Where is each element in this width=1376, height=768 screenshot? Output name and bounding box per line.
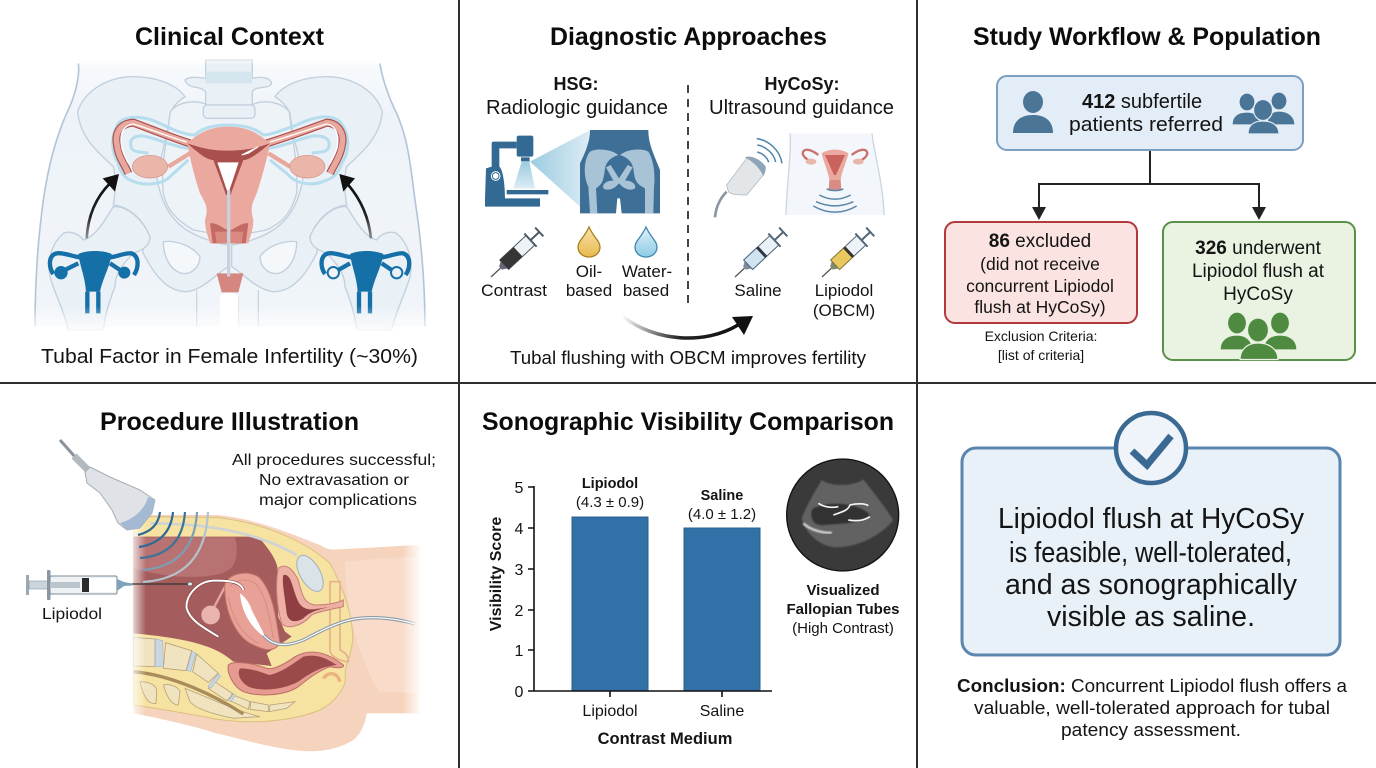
bar: lipiodol [572,517,648,691]
box: excluded: concurrent Lipiodol [966,276,1114,296]
reproductive tract in detail [113,117,348,277]
body silhouette [35,63,425,327]
caption: tubal factor: Tubal Factor in Female Infertility (~30%) [41,346,418,368]
panel: diagnostic approaches [481,23,894,368]
caption: visualized fallopian tubes [786,582,900,637]
panel: conclusion [957,413,1348,740]
box: excluded [945,222,1137,323]
icon: saline syringe [729,225,789,284]
y tick labels: 5 [515,480,524,497]
label: lipiodol OBCM: (OBCM) [813,301,875,320]
icon: ultrasound probe [60,440,155,530]
bar chart: Saline [700,703,744,720]
left hip bone [78,77,228,292]
box: underwent flush [1163,222,1355,360]
subheading: HSG: Radiologic guidance [486,97,668,119]
peritoneal cavity [133,537,292,666]
subheading: HyCoSy [709,74,894,119]
leg columns [197,290,258,327]
label: water-based: Water- [622,262,672,281]
panel: sonographic visibility comparison [482,408,900,748]
icon: body with uterus [786,133,884,215]
text: exclusion criteria [985,328,1097,363]
uterine cavity [240,593,265,637]
text: conclusion: patency assessment. [1061,720,1241,740]
light cavity area [133,537,237,577]
central canal line [224,190,234,277]
caption: visualized fallopian tubes: Fallopian Tubes [786,601,900,618]
icon: patient group [1232,92,1295,134]
icon: lipiodol syringe [816,225,876,284]
y tick labels: 3 [515,562,524,579]
box: underwent flush: Lipiodol flush at [1192,261,1325,282]
label: lipiodol: Lipiodol [42,606,102,623]
spine [185,60,272,105]
box: patients referred: patients referred [1069,114,1223,136]
arrow: right [339,174,371,238]
value label: lipiodol: (4.3 ± 0.9) [576,494,644,511]
icon: contrast syringe [485,225,545,284]
ovary and ligament [212,587,225,612]
conclusion box: is feasible, well-tolerated, [1009,537,1292,569]
box: underwent flush: HyCoSy [1223,284,1293,305]
catheter [263,618,415,645]
imaging icons [485,130,884,217]
label: oil-based: Oil- [576,262,602,281]
icon: blue uterus right [322,251,409,313]
bladder wall [277,566,343,627]
yellow fat layer [133,517,353,722]
heading: study workflow: Study Workflow & Population [973,23,1321,51]
sacral discs [155,639,236,702]
icon: blue uterus left [50,251,138,313]
box: excluded: flush at HyCoSy) [974,297,1106,317]
flow connectors [1032,150,1266,220]
conclusion box: Lipiodol flush at HyCoSy [998,503,1304,535]
rectum lumen [239,656,337,689]
y axis title: Visibility Score [488,517,505,631]
label: lipiodol OBCM: Lipiodol [815,281,873,300]
box: excluded: 86 excluded [989,231,1091,252]
label: oil-based [566,262,612,300]
bladder lumen [283,575,337,621]
icon: ultrasound waves [138,512,208,582]
y tick labels: 0 [515,684,524,701]
y tick labels: 1 [515,643,524,660]
right hip bone [232,77,382,292]
fade bottom [30,306,430,336]
caption: visualized fallopian tubes: (High Contrast) [792,620,894,637]
subheading: HSG [486,74,668,119]
uterine body [187,127,270,243]
left fade [128,510,146,735]
text: conclusion: valuable, well-tolerated approach for tubal [974,698,1330,718]
left femur [49,207,150,330]
heading: clinical context: Clinical Context [135,23,325,51]
icon: oil drop [578,227,600,257]
x axis title: Contrast Medium [598,730,732,748]
sagittal anatomy illustration [133,515,420,751]
heading: procedure illustration: Procedure Illustration [100,408,359,436]
text: conclusion: Conclusion: Concurrent Lipiodol flush offers a [957,676,1348,696]
sacrum [163,102,297,237]
rectum wall [228,652,344,695]
value label: lipiodol [576,476,644,511]
text: exclusion criteria: Exclusion Criteria: [985,328,1097,344]
box: underwent flush: 326 underwent [1195,238,1322,259]
right obturator foramen [260,241,297,274]
uterus [225,573,280,650]
text: procedures successful: major complications [259,492,417,509]
box: excluded: (did not receive [980,254,1100,274]
icon: single patient [1013,91,1053,133]
panel: procedure illustration [26,408,436,751]
thigh highlight [345,557,420,693]
heading: sonographic visibility: Sonographic Visibility Comparison [482,408,894,436]
arrow: curved to Lipiodol [622,316,753,338]
left ovary [132,155,168,178]
right ovary [290,155,325,178]
anal curve [323,674,340,682]
uterine cavity [187,143,270,195]
pubic bar [330,582,348,662]
right fade [402,530,422,730]
right fallopian tube [267,123,343,173]
icon: x-ray machine [485,130,590,207]
subheading: HyCoSy: Ultrasound guidance [709,97,894,119]
value label: saline: (4.0 ± 1.2) [688,506,756,523]
cervix [210,223,248,243]
text: 412 patients: 412 subfertile [1082,91,1202,113]
dashed divider [687,85,689,304]
value label: lipiodol: Lipiodol [582,476,638,492]
label: water-based: based [623,281,669,300]
filled fallopian tube [187,581,243,637]
subheading: HSG: HSG: [554,74,598,94]
label: contrast: Contrast [481,281,547,300]
label: oil-based: based [566,281,612,300]
pelvic floor gap [220,293,238,328]
panel: clinical context [30,23,430,368]
text: procedures successful: No extravasation or [259,472,410,489]
organs in detail [187,551,415,695]
skin [133,515,420,751]
label: saline: Saline [734,281,782,300]
left obturator foramen [163,241,200,274]
arrow: left [87,174,119,238]
label: lipiodol OBCM [813,281,875,320]
grey organ [291,551,329,596]
icon: ultrasound probe [715,139,782,217]
pelvis illustration [35,60,425,330]
icon: green people group [1220,312,1297,360]
halo [113,117,348,184]
caption: tubal flushing: Tubal flushing with OBCM improves fertility [510,348,866,368]
y tick labels [515,480,524,701]
subheading: HyCoSy: HyCoSy: [764,74,840,94]
value label: saline [688,488,756,523]
panel: study workflow [945,23,1355,363]
text: conclusion [957,676,1348,740]
box: patients referred [997,76,1303,150]
conclusion box: visible as saline. [1047,601,1255,633]
icon: check circle [1116,413,1186,483]
ultrasound image [787,459,899,571]
text: procedures successful [232,452,436,509]
heading: diagnostic approaches: Diagnostic Approaches [550,23,827,51]
icon: lipiodol syringe [26,570,192,600]
axes [528,486,772,697]
icon: pelvis x-ray silhouette [580,130,660,213]
y tick labels: 4 [515,521,524,538]
conclusion box: and as sonographically [1005,569,1297,601]
ligaments [168,153,290,167]
label: water-based [622,262,672,300]
text: procedures successful: All procedures successful; [232,452,436,469]
sacral vertebrae [133,637,295,718]
fade top [30,52,430,66]
bar: saline [684,528,760,691]
caption: visualized fallopian tubes: Visualized [806,582,880,599]
right femur [310,207,411,330]
spinal canal [133,672,243,714]
peritoneum band [150,523,297,555]
bar chart [488,476,772,748]
text: exclusion criteria: [list of criteria] [998,347,1084,363]
icon: water drop [635,227,657,257]
y tick labels: 2 [515,603,524,620]
left fallopian tube [116,123,190,173]
value label: saline: Saline [701,488,743,504]
vaginal canal lower [217,273,243,292]
x tick labels: Lipiodol [582,703,638,720]
conclusion box [962,448,1340,655]
